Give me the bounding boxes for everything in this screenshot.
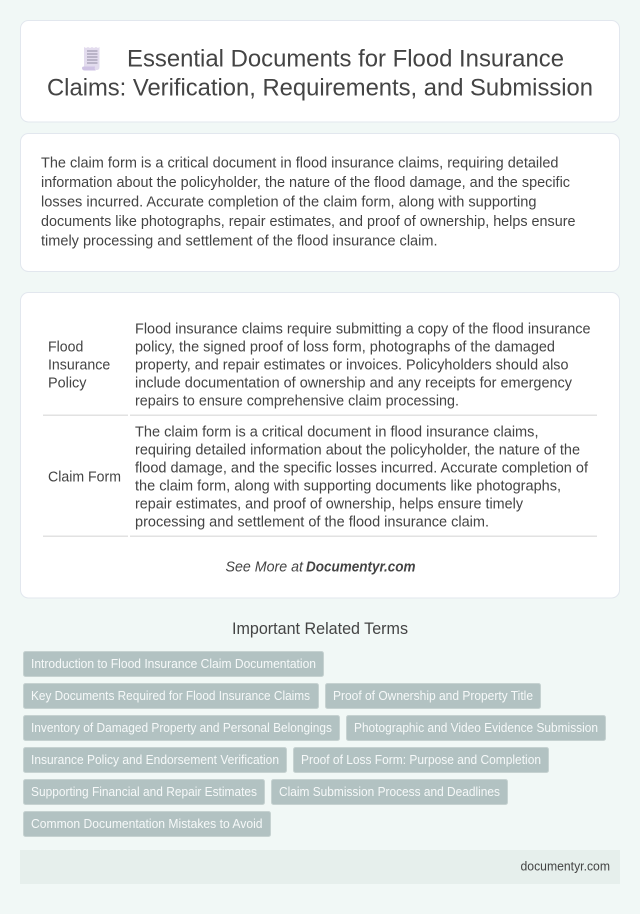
- tag: Introduction to Flood Insurance Claim Documentation: [31, 657, 316, 671]
- tag: Photographic and Video Evidence Submission: [354, 721, 598, 735]
- tag: Supporting Financial and Repair Estimates: [31, 785, 257, 799]
- footer bar: documentyr.com: [520, 858, 610, 874]
- panel: summary paragraph: [20, 134, 620, 272]
- row: Flood Insurance Policy: include documentation of ownership and any receipts for emergency: [135, 376, 573, 392]
- tag: [24, 748, 286, 772]
- tag: [294, 748, 548, 772]
- tag: [24, 652, 324, 676]
- title text: Essential Documents for Flood Insurance: [127, 46, 564, 72]
- tag: Claim Submission Process and Deadlines: [279, 785, 500, 799]
- title text: [47, 46, 593, 102]
- title text: Claims: Verification, Requirements, and Submission: [47, 74, 593, 102]
- see more link: See More at: [226, 560, 304, 576]
- panel: summary paragraph: losses incurred. Accurate completion of the claim form, along with supporting: [41, 194, 536, 210]
- tag: Inventory of Damaged Property and Personal Belongings: [31, 721, 332, 735]
- row: Claim Form: [48, 424, 589, 530]
- panel: summary paragraph: documents like photographs, repair estimates, and proof of ownership, helps ensure: [41, 213, 576, 230]
- tag: Key Documents Required for Flood Insurance Claims: [31, 689, 310, 703]
- row: Flood Insurance Policy: repairs to ensure comprehensive claim processing.: [135, 394, 459, 410]
- see more link: [226, 560, 416, 576]
- tag: Insurance Policy and Endorsement Verification: [31, 753, 279, 767]
- icon: document scroll: [82, 47, 100, 70]
- row: Flood Insurance Policy: policy, the signed proof of loss form, photographs of the damaged: [135, 340, 555, 356]
- row: Flood Insurance Policy: Insurance: [48, 358, 110, 374]
- footer bar: [20, 850, 620, 884]
- tag: [24, 716, 340, 740]
- row: Claim Form: The claim form is a critical document in flood insurance claims,: [135, 424, 538, 440]
- row: Claim Form: processing and settlement of the flood insurance claim.: [135, 514, 489, 530]
- row: Flood Insurance Policy: [48, 322, 590, 410]
- tag: Proof of Ownership and Property Title: [333, 689, 533, 703]
- tag: [24, 684, 318, 708]
- row: Flood Insurance Policy: Flood insurance claims require submitting a copy of the flood insurance: [135, 322, 590, 338]
- panel: summary paragraph: information about the policyholder, the nature of the flood damage, and the specific: [41, 174, 570, 191]
- row: Claim Form: requiring detailed information about the policyholder, the nature of the: [135, 442, 580, 458]
- tag: [326, 684, 540, 708]
- panel: summary paragraph: The claim form is a critical document in flood insurance claims, requiring detailed: [41, 154, 558, 172]
- panel: title card: [20, 20, 620, 122]
- tag: [346, 716, 606, 740]
- tag list: [24, 652, 606, 836]
- panel: documents table: [20, 292, 620, 598]
- heading: important related terms: Important Related Terms: [232, 620, 408, 638]
- tag: Proof of Loss Form: Purpose and Completion: [301, 753, 541, 767]
- panel: summary paragraph: timely processing and settlement of the flood insurance claim.: [41, 232, 438, 250]
- row: Claim Form: repair estimates, and proof of ownership, helps ensure timely: [135, 496, 524, 512]
- row: Claim Form: the claim form, along with supporting documents like photographs,: [135, 478, 561, 494]
- tag: Common Documentation Mistakes to Avoid: [31, 817, 262, 831]
- row: Flood Insurance Policy: Flood: [48, 340, 83, 356]
- tag: [24, 812, 270, 836]
- row: Claim Form: Claim Form: [48, 470, 121, 486]
- tag: [24, 780, 264, 804]
- tag: [272, 780, 508, 804]
- see more link: Documentyr.com: [306, 560, 416, 576]
- row: Flood Insurance Policy: Policy: [48, 376, 87, 392]
- row: Flood Insurance Policy: property, and repair estimates or invoices. Policyholders should also: [135, 358, 568, 374]
- row: Claim Form: flood damage, and the specific losses incurred. Accurate completion of: [135, 460, 589, 476]
